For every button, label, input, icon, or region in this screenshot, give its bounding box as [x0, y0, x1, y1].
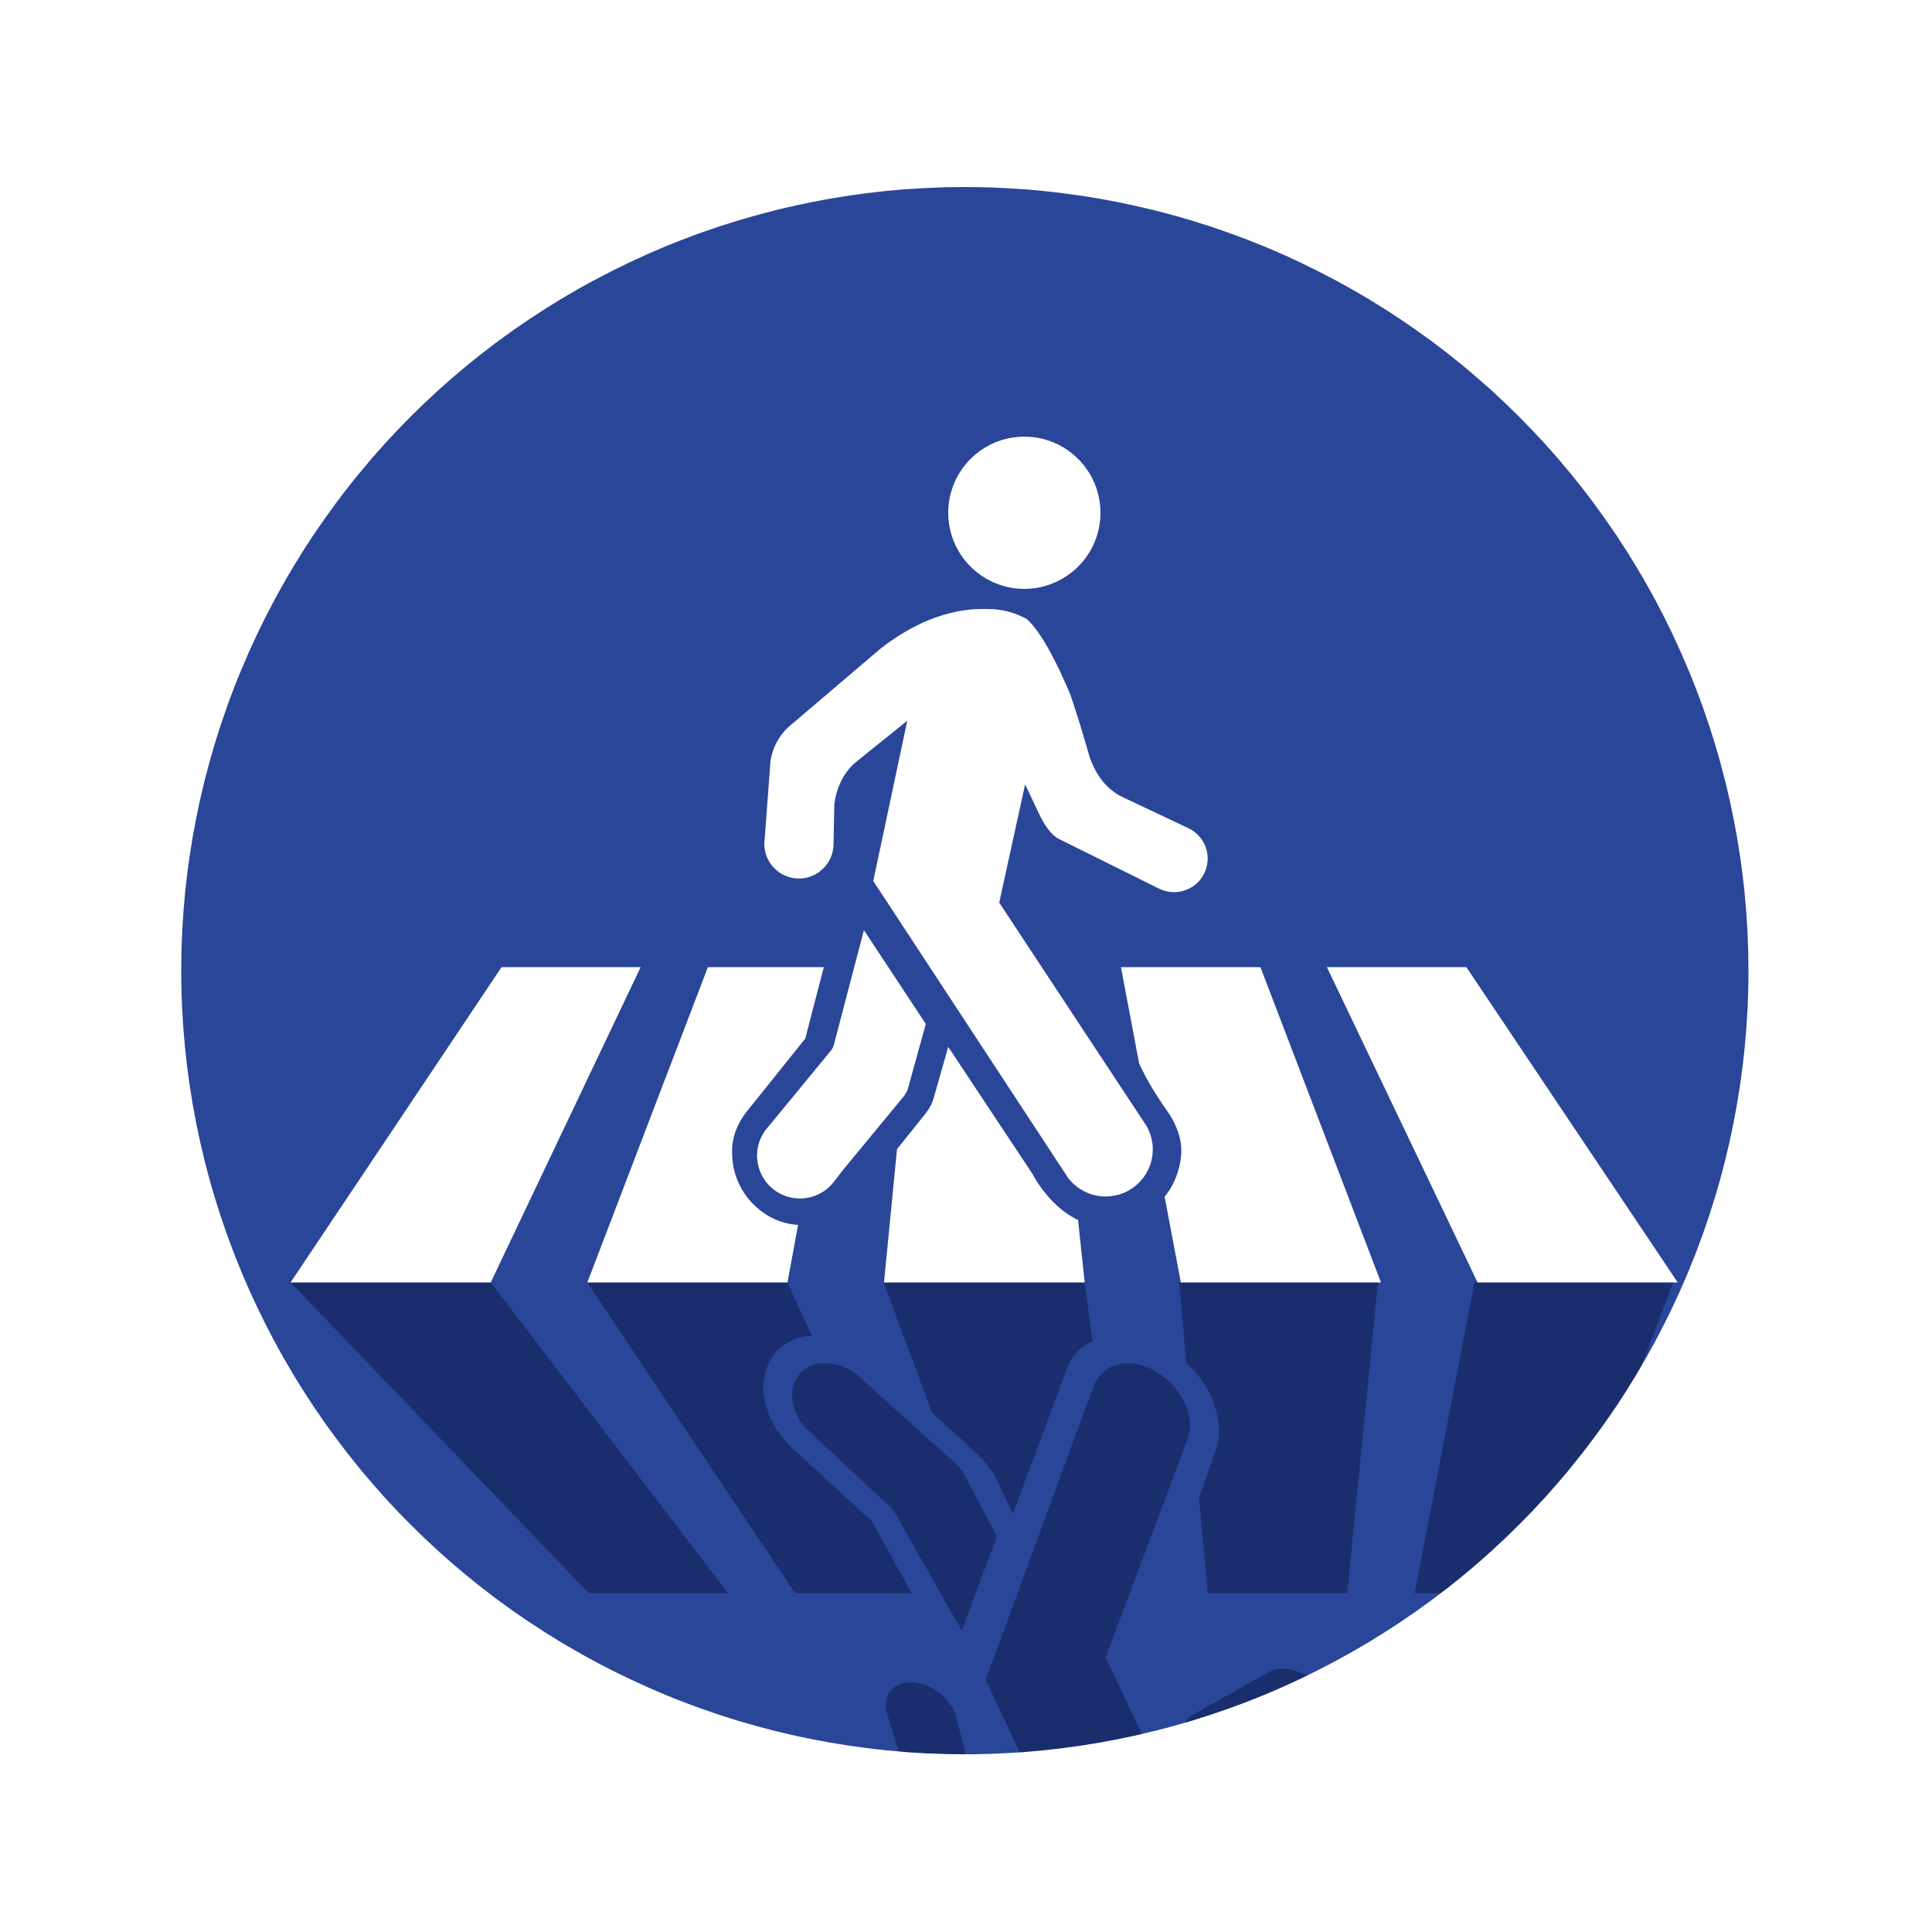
stripe 3 — [884, 1047, 1085, 1283]
shadow stripe 1 — [291, 1283, 728, 1594]
crosswalk stripes — [291, 968, 1678, 1283]
shadow stripe 2 — [587, 1283, 912, 1594]
shadow: crosswalk stripes and walker reflection — [291, 1283, 1673, 1770]
icon: walking pedestrian — [757, 437, 1208, 1199]
shadow stripe 3 — [883, 1283, 1093, 1514]
panel: blue circular sign — [181, 187, 1748, 1754]
shadow stripe 5 — [1415, 1283, 1673, 1594]
stripe 5 — [1327, 968, 1678, 1283]
stripe 2 — [587, 968, 824, 1283]
shadow: front leg — [986, 1363, 1190, 1770]
head — [948, 437, 1100, 589]
stripe 4 — [1121, 968, 1381, 1283]
back leg — [757, 930, 926, 1199]
shadow: back leg — [792, 1363, 997, 1631]
shadow: left arm — [886, 1682, 966, 1754]
torso, arms and front leg — [764, 609, 1208, 1196]
shadow stripe 4 — [1179, 1283, 1378, 1594]
shadow: right arm — [1185, 1668, 1308, 1723]
stripe 1 — [291, 968, 641, 1283]
